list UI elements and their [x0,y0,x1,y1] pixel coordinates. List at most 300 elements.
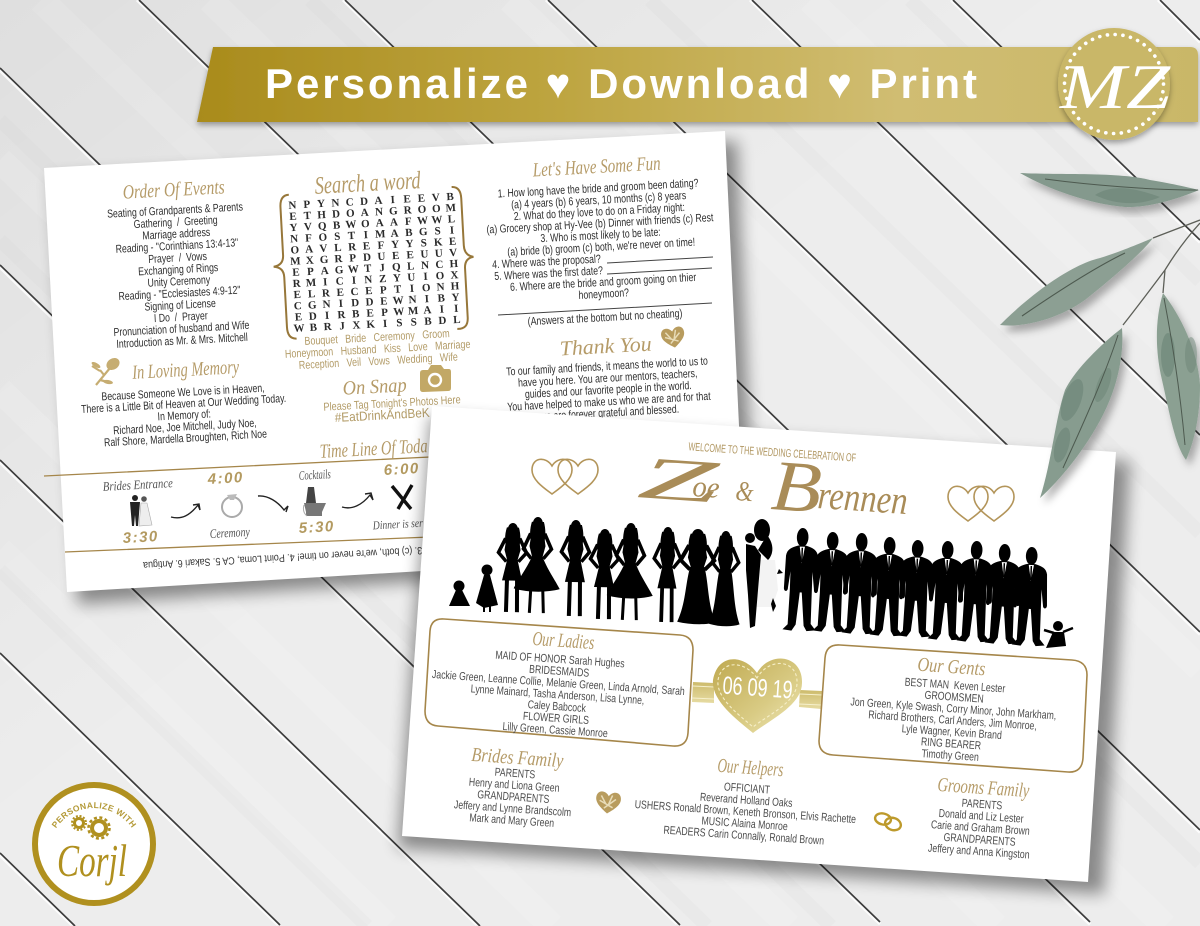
word search grid: T [394,283,402,296]
text: order of events list: Seating of Grandparents & Parents [107,201,243,221]
word search grid: D [351,297,360,309]
word search grid: N [322,299,331,311]
text: order of events list: Signing of License [144,298,216,314]
icon: fork and knife [392,485,412,509]
word search grid: N [421,260,429,272]
word search word list: Bouquet Bride Ceremony Groom [304,328,450,348]
word search grid: W [293,322,305,335]
word search grid: Y [289,222,298,234]
word search grid: E [292,267,300,279]
word search grid: I [363,229,368,241]
text: brides family list: Henry and Liona Green [468,777,560,795]
icon: rose [91,355,122,385]
word search grid: R [337,309,347,321]
word search grid: A [320,265,329,277]
word search grid: B [446,191,455,203]
panel: our gents [819,645,1087,772]
flower girl [476,564,498,612]
text: ladies list: Jackie Green, Leanne Collie, Melanie Green, Linda Arnold, Sarah [432,669,685,699]
word search grid: S [396,317,403,329]
title: couple names: B [769,445,824,528]
word search grid: Q [392,261,401,274]
arrow 1 [171,504,200,518]
time 4:00: 4:00 [206,469,244,488]
icon: gears [72,816,110,838]
word search grid: F [377,240,385,252]
timeline: dinner: Dinner is ser [372,516,423,532]
gold heart with date [713,658,802,733]
heading: in loving memory: In Loving Memory [131,356,240,384]
text: helpers list: READERS Carin Connally, Ronald Brown [663,825,825,848]
leaf 2 [1000,238,1153,326]
text: in loving memory: Ralf Shore, Mardella Broughten, Rich Noe [104,429,268,450]
word search grid: Y [391,239,400,251]
word search grid: R [334,253,344,265]
word search grid: E [363,240,371,253]
word search grid: I [423,271,428,283]
word search grid: E [417,192,425,205]
bride and groom [745,519,783,628]
word search grid: P [380,284,387,297]
arrow 3 [342,493,373,508]
word search grid: T [303,210,312,222]
text: in loving memory: Because Someone We Love is in Heaven, [101,383,265,404]
text: quiz questions: (a) bride (b) groom (c) both, we're never on time! [507,237,695,259]
word search grid: I [351,275,356,287]
word search grid: B [309,322,318,334]
word search grid: R [323,321,333,333]
text: gents list: Richard Brothers, Carl Anders, Jim Monroe, [868,709,1037,733]
word search grid: V [431,192,440,204]
heading: order of events: Order Of Events [122,176,225,204]
word search grid: L [407,260,415,273]
text: tag photos: Please Tag Tonight's Photos Here [323,394,461,414]
word search grid: I [390,194,395,206]
text: order of events list: I Do / Prayer [154,310,209,325]
word search grid: B [424,315,433,328]
text: quiz questions: (a) Grocery shop at Hy-Vee (b) Dinner with friends (c) Rest [486,212,714,237]
word search grid: N [436,281,445,294]
groomsmen [782,527,1049,647]
text: ladies list [428,645,687,746]
word search grid: A [390,216,398,229]
text: brides family list: Mark and Mary Green [469,812,555,830]
text: ladies list: FLOWER GIRLS [523,711,589,727]
word search grid: N [364,274,373,286]
word search grid: O [435,270,445,282]
text: brides family list: Jeffery and Lynne Brandscolm [453,799,572,820]
word search grid: E [403,193,411,206]
leaf 3 [1040,328,1122,498]
text: quiz questions: (Answers at the bottom but no cheating) [527,308,683,329]
word search grid: Z [379,273,387,285]
text: helpers list [633,775,858,850]
word search grid: A [390,228,399,240]
text: helpers list: MUSIC Alaina Monroe [701,815,788,834]
word search grid: I [454,303,459,315]
word search grid: H [317,209,327,221]
text: quiz questions: 2. What do they love to do on a Friday night: [513,202,685,223]
text: helpers list: Reverand Holland Oaks [699,792,793,810]
text: in loving memory [80,381,288,451]
timeline: brides entrance: Brides Entrance [102,475,173,494]
arrow 2 [258,496,288,512]
timeline rules [44,457,430,552]
badge text: PERSONALIZE WITH [52,802,136,828]
word search grid: H [449,258,459,270]
timeline: dinner [372,460,423,532]
word search grid: V [304,221,312,233]
word search grid: S [420,237,427,250]
timeline: cocktails: Cocktails [298,466,331,483]
text: quiz questions: 3. Who is most likely to be late: [540,227,661,246]
flower girl toddler [449,580,470,606]
icon: right hearts [948,486,1014,521]
text: gents list: Timothy Green [921,748,979,764]
text: quiz questions: 4. Where was the proposal? [492,253,601,272]
word search grid: K [434,236,443,249]
heading: thank you: Thank You [559,332,652,360]
word search grid: O [361,218,370,230]
icon: cocktail bucket [303,487,326,516]
word search grid: U [407,271,416,284]
icon: glitter heart [595,791,622,815]
word search grid: R [403,204,413,217]
word search grid: S [434,225,441,238]
word search grid: I [383,318,388,330]
word search grid: C [345,196,354,209]
word search grid: U [420,248,429,261]
bridesmaids [497,517,741,626]
icon: ring [222,494,242,517]
word search grid: P [381,307,388,319]
title: couple names [635,444,909,528]
heading: search a word: Search a word [314,167,422,200]
word search grid: I [338,298,343,310]
word search grid: T [364,263,372,275]
heading: let's have some fun: Let's Have Some Fun [531,153,661,181]
word search grid: Y [317,198,325,210]
word search grid: E [336,287,344,299]
word search grid: M [445,202,457,215]
section: grooms family [928,774,1033,862]
date band right [799,690,822,709]
text: in loving memory: There is a Little Bit of Heaven at Our Wedding Today. [81,393,287,416]
word search grid: E [406,249,414,262]
heading: brides family: Brides Family [471,744,564,772]
badge script: Corjl [57,835,127,886]
text: grooms family list: PARENTS [961,798,1003,813]
badge: personalize with Corjl [32,782,156,906]
word search grid: W [345,219,357,231]
word search grid: D [309,310,317,323]
text: ladies list: BRIDESMAIDS [529,664,590,680]
word search grid: I [323,276,328,288]
word search grid: W [393,306,405,318]
word search grid: D [363,251,371,264]
word search grid: C [350,286,359,298]
word search grid: E [294,311,302,324]
word search grid: G [334,264,344,277]
word search grid: W [417,215,428,227]
MZ logo badge: MZ [1059,51,1172,122]
text: brides family list [453,764,574,831]
word search grid [287,191,463,335]
text: welcome line: WELCOME TO THE WEDDING CELEBRATION OF [688,441,856,465]
word search grid: O [346,207,355,220]
word search grid: M [375,228,386,241]
text: upside-down quiz answers: 3. (c) both, we're never on time! 4. Point Loma, CA 5. Sakari 6. Antigua [142,544,422,571]
text: gents list: Jon Green, Kyle Swash, Corry Minor, John Markham, [850,696,1057,723]
title: couple names: rennen [816,472,909,523]
word search grid: B [405,227,414,239]
ring bearer [1044,621,1073,648]
word search grid: C [294,300,302,312]
icon: left hearts [532,459,598,494]
text: gents list: GROOMSMEN [924,690,984,706]
word search grid: B [352,308,360,321]
panel: front card [402,406,1116,882]
text: order of events list: Reading - "Ecclesiastes 4:9-12" [118,285,241,304]
heading: grooms family: Grooms Family [937,774,1030,802]
word search grid: O [417,204,427,216]
word search grid: L [308,288,316,301]
time 3:30: 3:30 [122,528,159,547]
word search grid: S [410,316,417,329]
word search grid: W [348,263,359,276]
time 6:00: 6:00 [383,460,420,479]
heading: our ladies: Our Ladies [532,628,595,654]
text: order of events list: Unity Ceremony [147,274,211,290]
word search grid: B [437,292,446,305]
word search grid: X [450,269,459,282]
word search grid: N [331,197,340,209]
word search grid: Y [451,292,460,304]
word search grid: E [366,307,374,320]
word search grid: V [449,247,458,259]
word search grid: U [377,251,386,263]
text: ladies list: Caley Babcock [527,699,587,715]
word search grid: R [348,241,357,253]
text: gents list [847,673,1058,769]
word search grid: E [365,285,373,297]
title: couple names: Z [635,444,722,516]
icon: bride and groom [130,495,152,526]
word search grid: X [306,255,314,267]
word search grid: N [290,233,299,245]
text: order of events list: Introduction as Mr. & Mrs. Mitchell [116,332,248,351]
word search grid: D [438,315,447,327]
word search grid: K [366,319,376,331]
word search grid: U [435,248,443,260]
date: 06 09 19 [722,671,794,704]
word search grid: Y [393,272,401,285]
text: ladies list: Lynne Mainard, Tasha Anderson, Lisa Lynne, [470,683,645,708]
word search grid: M [408,305,419,318]
text: thank you message [505,355,712,425]
heading: on snap: On Snap [342,374,407,400]
word search grid: E [380,295,388,308]
word search grid: I [450,225,454,237]
word search grid: Q [318,220,327,233]
word search grid: P [349,252,357,265]
word search grid: B [333,219,341,232]
word search grid: W [392,295,404,307]
word search grid: L [453,314,461,326]
word search grid: S [334,231,341,243]
text: helpers list: OFFICIANT [724,781,770,797]
text: hashtag: #EatDrinkAndBeK [334,405,430,425]
timeline: ceremony: Ceremony [209,524,250,541]
word search grid: F [305,232,313,245]
text: order of events list [107,201,251,351]
top banner [197,47,1198,122]
section: brides family [453,744,574,831]
panel: back card [44,131,745,592]
text: thank you message: guides and our favorite people in the world. [525,380,692,401]
word search grid: O [290,244,300,257]
word search grid: I [325,310,330,322]
text: in loving memory: In Memory of: [157,409,211,424]
text: grooms family list: Carie and Graham Brown [931,819,1030,838]
panel: our ladies [425,619,693,746]
text: quiz questions: 1. How long have the bride and groom been dating? [497,178,699,201]
word search grid: R [322,287,331,300]
text: quiz questions: (a) 4 years (b) 6 years, 10 months (c) 8 years [511,190,686,212]
word search grid: D [332,208,340,221]
word search grid: L [447,213,455,226]
MZ logo badge [1058,28,1172,140]
text: order of events list: Pronunciation of husband and Wife [113,320,250,339]
word search grid: M [306,277,317,289]
text: helpers list: USHERS Ronald Brown, Keneth Bronson, Elvis Rachette [634,799,857,826]
word search word list: Reception Veil Vows Wedding Wife [299,352,458,372]
word search grid: C [335,275,344,288]
word search grid: R [292,278,302,290]
word search grid: E [449,236,457,248]
text: brides family list: GRANDPARENTS [477,789,550,806]
banner heading: Personalize ♥ Download ♥ Print [265,60,977,107]
word search grid: I [410,283,414,295]
word search grid: N [288,199,297,212]
word search grid: M [290,255,302,268]
text: order of events list: Reading - "Corinthians 13:4-13" [115,237,239,256]
text: quiz questions [484,177,719,331]
word search grid: N [408,294,417,306]
text: quiz questions: 6. Where are the bride and groom going on thier [510,272,697,294]
word search grid: O [432,203,441,215]
text: gents list: BEST MAN Keven Lester [904,677,1006,696]
word search grid: A [305,243,314,256]
heading: our gents: Our Gents [917,654,986,680]
text: order of events list: Marriage address [142,227,211,243]
text: thank you message: have you here. You are our mentors, teachers, [518,368,698,390]
word search grid: T [348,230,356,242]
text: gents list: Lyle Wagner, Kevin Brand [901,723,1002,742]
text: in loving memory: Richard Noe, Joe Mitchell, Judy Noe, [113,418,257,438]
text: grooms family list [928,796,1033,862]
word search grid: C [435,259,444,271]
word search grid: O [422,282,431,294]
word search grid: A [375,217,384,230]
word search grid: A [423,304,432,317]
word search grid: D [360,196,368,208]
word search grid: P [303,199,311,211]
text: ladies list: Lilly Green, Cassie Monroe [502,721,608,741]
text: thank you message: You have helped to make us who we are and for that [507,391,711,414]
text: grooms family list: Jeffery and Anna Kingston [928,843,1030,862]
word search grid: G [319,254,329,266]
text: thank you message: To our family and friends, it means the world to us to [506,356,708,379]
word search grid: L [334,242,342,254]
leaf 4 [1157,293,1200,460]
word search grid: P [307,266,314,278]
text: thank you message: we are forever grateful and blessed. [539,404,679,424]
text: gents list: RING BEARER [921,736,981,753]
word search grid: I [424,293,429,305]
word search grid: X [352,319,361,332]
word search grid: W [431,214,443,227]
section: our helpers [633,755,858,850]
text: quiz questions: 5. Where was the first date? [494,265,604,283]
word search grid: O [318,231,328,244]
word search grid: F [405,216,412,228]
word search braces [270,185,477,340]
word search grid: J [339,320,346,332]
word search word list [284,327,472,373]
word search grid: E [392,250,400,262]
text: order of events list: Exchanging of Rings [138,262,219,279]
title: couple names: oe [692,470,721,505]
title: couple names: & [735,476,755,508]
icon: glitter heart [660,326,686,350]
text: order of events list: Prayer / Vows [148,251,207,266]
heading: our helpers: Our Helpers [717,755,784,781]
word search grid: G [419,226,428,238]
timeline: cocktails [298,466,335,537]
back card shadow [52,141,755,604]
decoration: eucalyptus leaves [1000,173,1200,498]
word search grid: G [308,299,317,312]
word search word list: Honeymoon Husband Kiss Love Marriage [285,339,471,361]
icon: gold rings [874,812,902,832]
word search grid: G [389,205,398,218]
word search grid: N [375,206,383,218]
text: ladies list: MAID OF HONOR Sarah Hughes [495,650,625,671]
quiz answer lines [498,257,713,315]
word search grid: E [289,211,297,223]
text: grooms family list: Donald and Liz Lester [938,808,1024,826]
time 5:30: 5:30 [298,518,335,537]
word search grid: E [293,289,301,301]
date band left [692,682,714,703]
timeline: ceremony [206,469,250,541]
word search grid: V [319,243,328,255]
front card shadow [398,416,1130,894]
text: order of events list: Gathering / Greeting [133,215,218,232]
text: quiz questions: honeymoon? [578,287,630,302]
word search grid: A [360,207,369,219]
text: brides family list: PARENTS [494,767,536,782]
word search grid: D [365,296,374,309]
timeline: brides entrance [102,475,173,547]
text: grooms family list: GRANDPARENTS [943,832,1016,849]
word search grid: I [439,304,444,316]
silhouettes: wedding party [449,517,1073,648]
word search grid: A [374,195,383,207]
word search grid: H [450,280,460,293]
word search grid: J [379,262,386,274]
